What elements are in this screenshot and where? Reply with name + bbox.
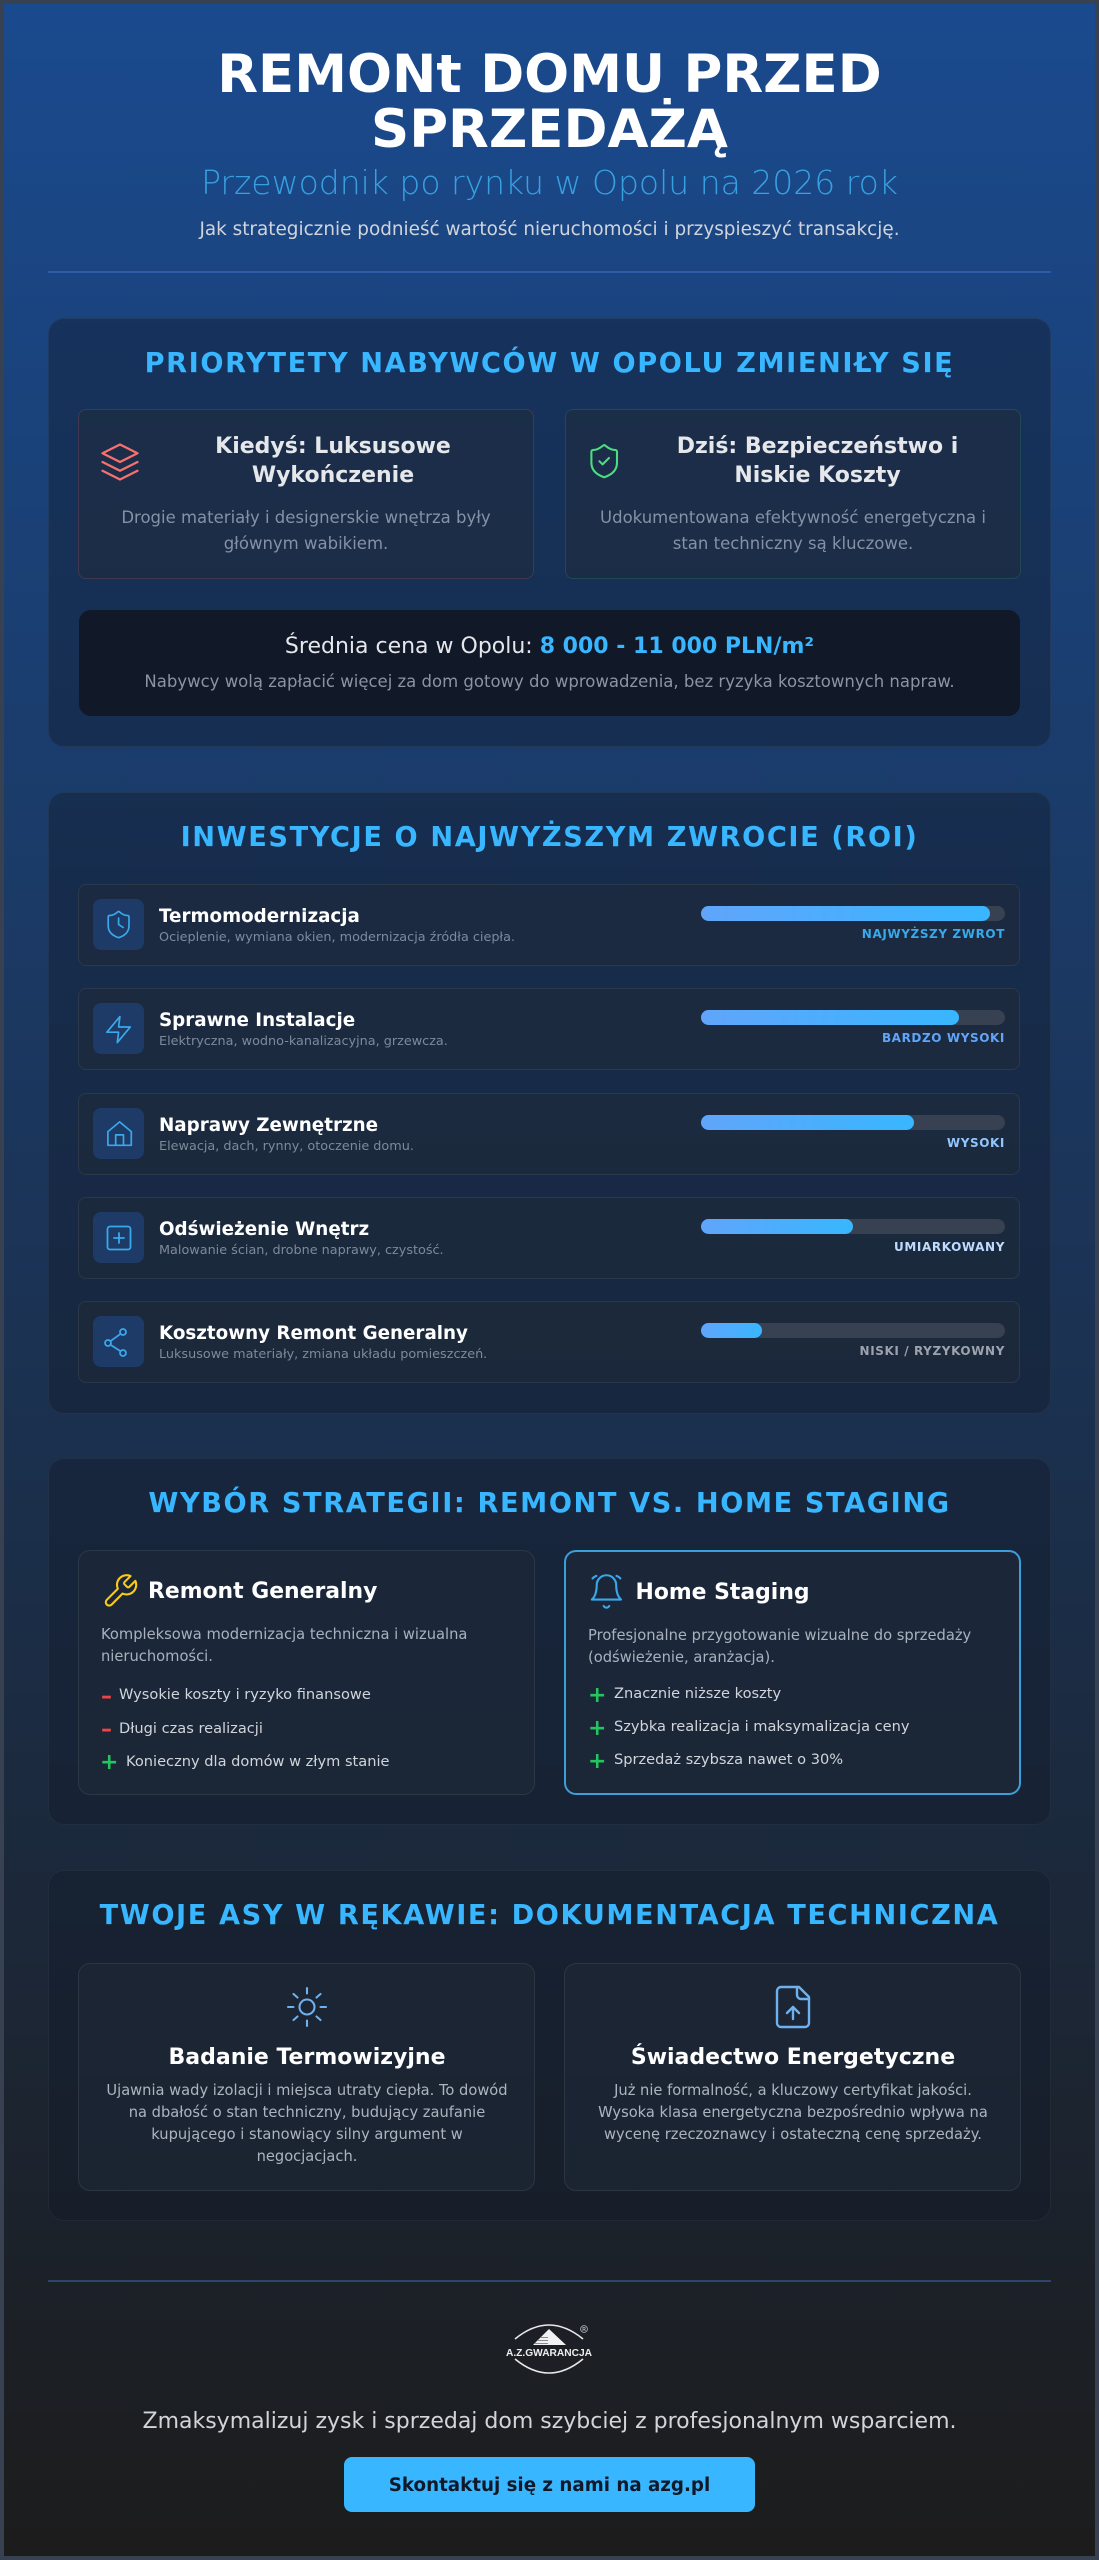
card text: Udokumentowana efektywność energetyczna i: [600, 508, 986, 527]
row text: Luksusowe materiały, zmiana układu pomieszczeń.: [159, 1347, 487, 1362]
row text: [159, 906, 515, 945]
card title: Świadectwo Energetyczne: [631, 2045, 955, 2070]
logo: a.z.gwarancja: R: [582, 2327, 586, 2333]
row text: Malowanie ścian, drobne naprawy, czystość.: [159, 1243, 444, 1258]
card text: na dbałość o stan techniczny, budujący zaufanie: [129, 2104, 485, 2120]
roi bar: WYSOKI: [947, 1136, 1005, 1150]
card text: [600, 508, 986, 553]
logo: a.z.gwarancja: [506, 2324, 593, 2374]
heading: priorytety: PRIORYTETY NABYWCÓW W OPOLU ZMIENIŁY SIĘ: [145, 348, 954, 379]
panel: wybór strategii: [48, 1458, 1051, 1825]
card title: Home Staging: [636, 1580, 810, 1605]
roi bar: [701, 1323, 1005, 1358]
roi bar: NAJWYŻSZY ZWROT: [862, 927, 1005, 941]
roi bar: [701, 1115, 1005, 1150]
card: badanie termowizyjne: [78, 1963, 535, 2191]
title: REMONt DOMU PRZED: [217, 44, 882, 105]
footer text: Zmaksymalizuj zysk i sprzedaj dom szybciej z profesjonalnym wsparciem.: [142, 2409, 956, 2434]
subtitle: Przewodnik po rynku w Opolu na 2026 rok: [201, 162, 898, 202]
list: cons and pros: Konieczny dla domów w złym stanie: [126, 1753, 390, 1770]
icon: file up: [776, 1986, 810, 2028]
list: pros: +: [588, 1683, 606, 1708]
card: home staging: [564, 1550, 1021, 1795]
list: cons and pros: [100, 1684, 390, 1775]
card title: Niskie Koszty: [734, 463, 901, 488]
icon: layers: [101, 443, 139, 481]
card title: Dziś: Bezpieczeństwo i: [677, 434, 958, 459]
card title: [677, 434, 958, 488]
card text: Profesjonalne przygotowanie wizualne do sprzedaży: [588, 1627, 971, 1644]
card title: Remont Generalny: [148, 1579, 377, 1604]
footer: [142, 2324, 956, 2512]
card text: Już nie formalność, a kluczowy certyfikat jakości.: [614, 2082, 972, 2098]
card: dziś: [565, 409, 1021, 579]
row text: Elewacja, dach, rynny, otoczenie domu.: [159, 1139, 414, 1154]
card text: negocjacjach.: [257, 2148, 357, 2164]
card: świadectwo energetyczne: [564, 1963, 1021, 2191]
card title: Badanie Termowizyjne: [168, 2045, 446, 2070]
list: pros: Szybka realizacja i maksymalizacja ceny: [614, 1718, 910, 1735]
card title: Wykończenie: [252, 463, 414, 488]
row text: Odświeżenie Wnętrz: [159, 1219, 369, 1240]
title: [217, 44, 882, 160]
roi bar: UMIARKOWANY: [894, 1240, 1005, 1254]
row text: Elektryczna, wodno-kanalizacyjna, grzewcza.: [159, 1034, 448, 1049]
card text: [106, 2082, 508, 2164]
list: cons and pros: –: [101, 1684, 112, 1709]
tagline: Jak strategicznie podnieść wartość nieruchomości i przyspieszyć transakcję.: [199, 219, 900, 240]
icon: house: [107, 1121, 132, 1146]
panel: priorytety nabywców: [48, 318, 1051, 747]
button: [344, 2457, 755, 2512]
icon: share nodes: [104, 1328, 127, 1357]
card text: Kompleksowa modernizacja techniczna i wizualna: [101, 1626, 467, 1643]
card text: [598, 2082, 988, 2142]
price note: Nabywcy wolą zapłacić więcej za dom gotowy do wprowadzenia, bez ryzyka kosztownych napraw.: [144, 672, 955, 691]
panel: dokumentacja techniczna: [48, 1870, 1051, 2221]
row: odświeżenie wnętrz: [78, 1197, 1020, 1279]
title: SPRZEDAŻĄ: [371, 99, 728, 160]
card text: [588, 1627, 971, 1666]
row text: [159, 1010, 448, 1049]
roi bar: [701, 906, 1005, 941]
card text: Ujawnia wady izolacji i miejsca utraty ciepła. To dowód: [106, 2082, 508, 2098]
card text: [101, 1626, 467, 1665]
card: remont generalny: [78, 1550, 535, 1795]
list: cons and pros: –: [101, 1717, 112, 1742]
row text: [159, 1323, 487, 1362]
row: termomodernizacja: [78, 884, 1020, 966]
roi bar: BARDZO WYSOKI: [882, 1031, 1005, 1045]
card text: stan techniczny są kluczowe.: [673, 534, 913, 553]
heading: strategia: WYBÓR STRATEGII: REMONT VS. HOME STAGING: [148, 1488, 951, 1519]
row text: Termomodernizacja: [159, 906, 360, 927]
icon: lightning: [106, 1016, 132, 1044]
list: pros: [588, 1683, 910, 1774]
roi bar: NISKI / RYZYKOWNY: [860, 1344, 1005, 1358]
card text: głównym wabikiem.: [224, 534, 388, 553]
button: Skontaktuj się z nami na azg.pl: [389, 2475, 710, 2496]
price line: Średnia cena w Opolu: 8 000 - 11 000 PLN/m²: [285, 634, 814, 659]
card text: nieruchomości.: [101, 1648, 213, 1665]
list: cons and pros: Wysokie koszty i ryzyko finansowe: [119, 1686, 371, 1703]
list: pros: Sprzedaż szybsza nawet o 30%: [614, 1751, 843, 1768]
icon: wrench: [104, 1574, 138, 1607]
row text: Kosztowny Remont Generalny: [159, 1323, 468, 1344]
logo: a.z.gwarancja: A.Z.GWARANCJA: [506, 2348, 593, 2359]
card text: (odświeżenie, aranżacja).: [588, 1649, 775, 1666]
card text: kupującego i stanowiący silny argument w: [151, 2126, 463, 2142]
icon: bell: [590, 1574, 622, 1609]
card title: Kiedyś: Luksusowe: [215, 434, 451, 459]
heading: inwestycje: INWESTYCJE O NAJWYŻSZYM ZWROCIE (ROI): [181, 822, 918, 853]
callout: średnia cena: [79, 610, 1020, 716]
row text: Sprawne Instalacje: [159, 1010, 355, 1031]
row: kosztowny remont: [78, 1301, 1020, 1383]
roi bar: [701, 1219, 1005, 1254]
icon: shield clock: [107, 910, 130, 938]
heading: dokumentacja: TWOJE ASY W RĘKAWIE: DOKUMENTACJA TECHNICZNA: [100, 1900, 999, 1931]
card text: [121, 508, 491, 553]
card text: Drogie materiały i designerskie wnętrza były: [121, 508, 491, 527]
list: pros: +: [588, 1716, 606, 1741]
icon: shield check: [590, 444, 618, 478]
row: sprawne instalacje: [78, 988, 1020, 1070]
icon: sun: [287, 1987, 327, 2027]
card: kiedyś: [78, 409, 534, 579]
row text: [159, 1115, 414, 1154]
header: [198, 44, 900, 240]
list: cons and pros: Długi czas realizacji: [119, 1720, 263, 1737]
icon: plus square: [106, 1226, 132, 1250]
row text: Naprawy Zewnętrzne: [159, 1115, 378, 1136]
roi bar: [701, 1010, 1005, 1045]
row text: [159, 1219, 444, 1258]
list: pros: +: [588, 1749, 606, 1774]
card title: [215, 434, 451, 488]
row: naprawy zewnętrzne: [78, 1093, 1020, 1175]
card text: wycenę rzeczoznawcy i ostateczną cenę sprzedaży.: [604, 2126, 982, 2142]
row text: Ocieplenie, wymiana okien, modernizacja źródła ciepła.: [159, 930, 515, 945]
list: pros: Znacznie niższe koszty: [614, 1685, 781, 1702]
list: cons and pros: +: [100, 1750, 118, 1775]
card text: Wysoka klasa energetyczna bezpośrednio wpływa na: [598, 2104, 988, 2120]
panel: inwestycje roi: [48, 792, 1051, 1414]
